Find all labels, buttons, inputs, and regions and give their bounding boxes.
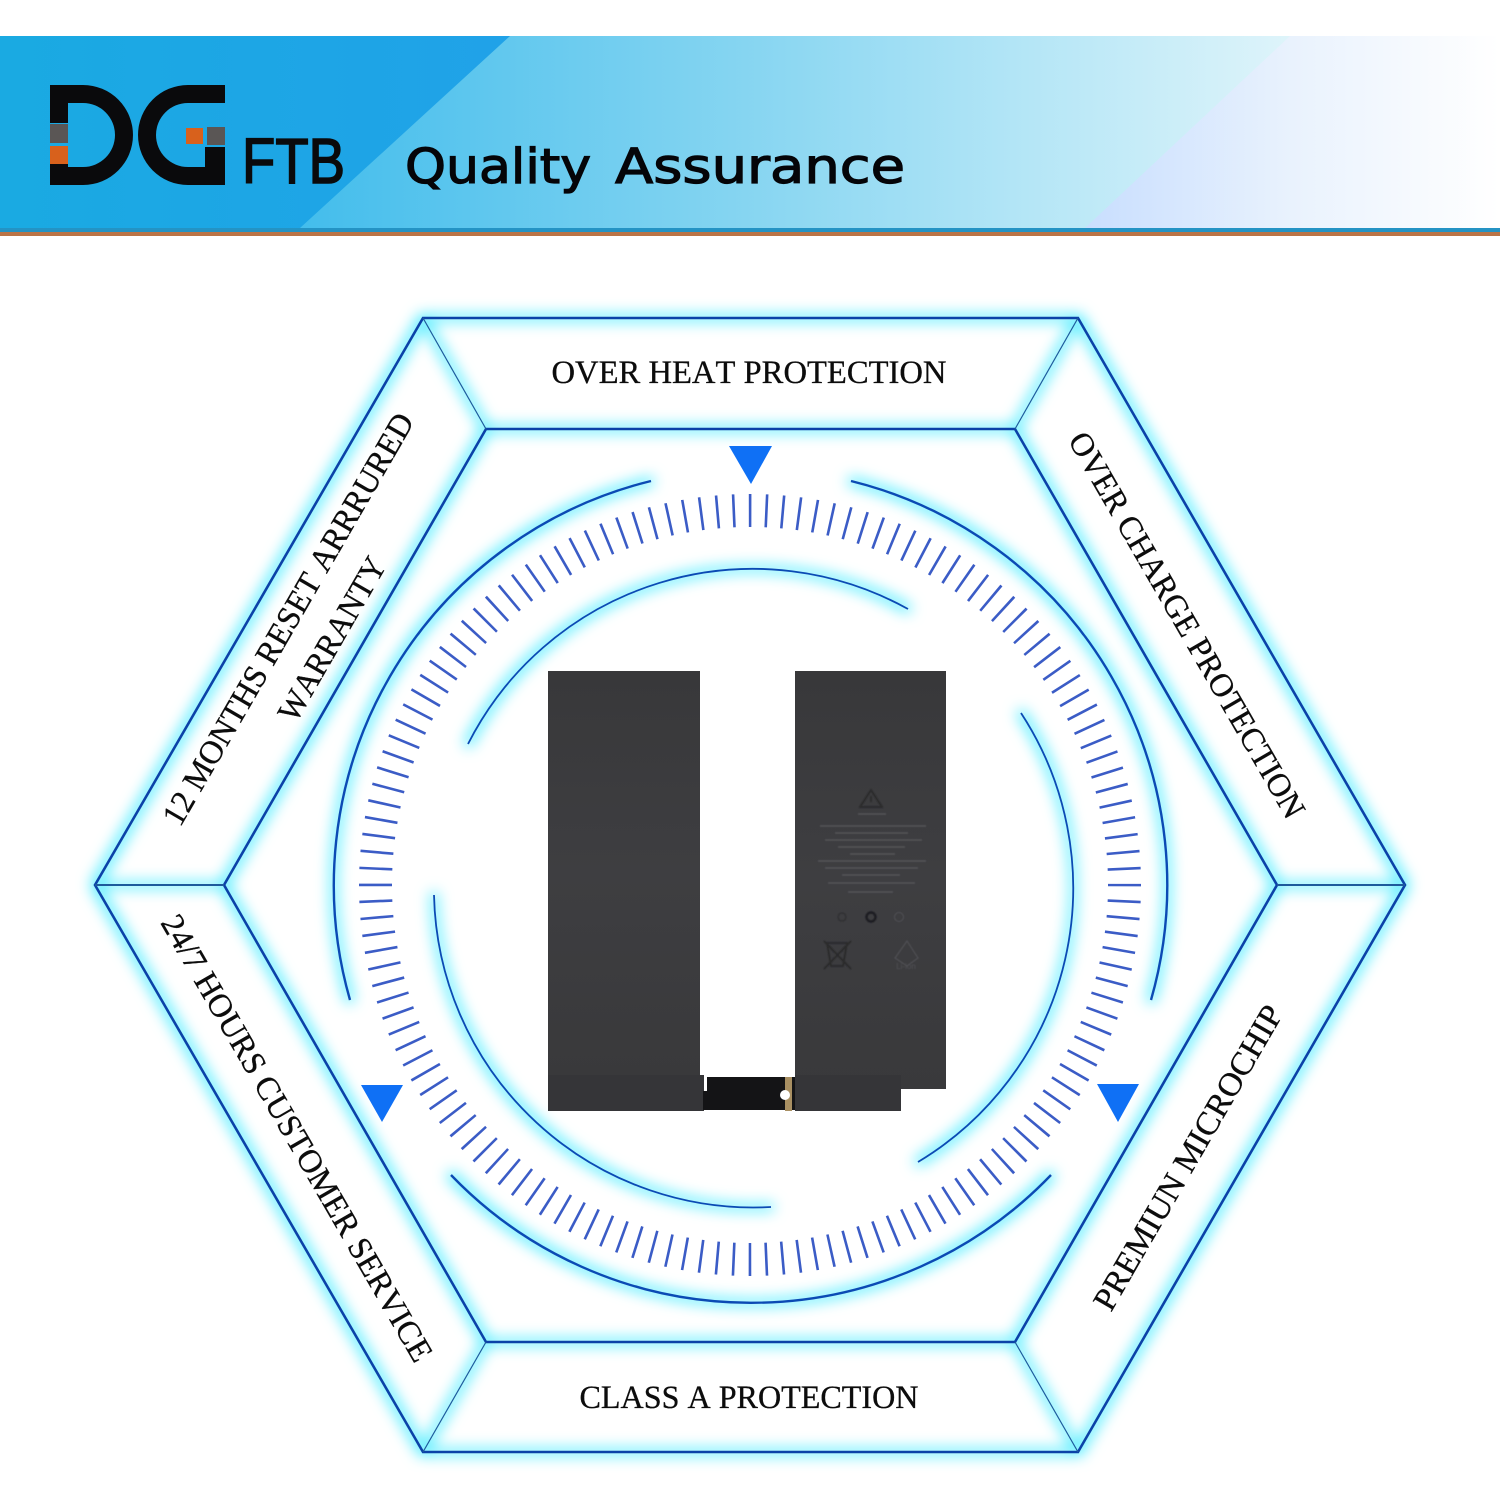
label: over charge protection: OVER CHARGE PROTECTION — [1061, 426, 1312, 825]
battery label — [818, 790, 926, 971]
left cell — [548, 671, 704, 1111]
inner hexagon — [224, 429, 1277, 1342]
heading: Quality Assurance: Assurance — [615, 139, 905, 195]
tick ring — [376, 510, 1124, 1260]
label: over heat protection: OVER HEAT PROTECTION — [552, 355, 947, 391]
logo: DG FTB: FTB — [242, 125, 345, 197]
right cell — [795, 671, 946, 1111]
direction triangles — [361, 446, 1139, 1122]
battery image — [548, 671, 946, 1111]
label: 24/7 hours customer service: 24/7 HOURS CUSTOMER SERVICE — [153, 909, 439, 1368]
outer hexagon — [95, 318, 1405, 1452]
hexagon and arc frame with glow — [95, 318, 1405, 1452]
battery label: Li-ion — [896, 962, 916, 971]
outer arcs — [334, 481, 1167, 1303]
label: premium microchip: PREMIUN MICROCHIP — [1087, 999, 1291, 1317]
header banner — [0, 36, 1500, 236]
logo: DG FTB — [50, 85, 345, 197]
label: class a protection: CLASS A PROTECTION — [580, 1380, 919, 1416]
inner arcs — [434, 569, 1073, 1207]
heading: Quality Assurance: Quality — [405, 139, 591, 195]
hexagon spokes — [95, 318, 1405, 1452]
label: 12 months warranty: WARRANTY — [271, 551, 394, 728]
label: 12 months warranty: 12 MONTHS RESET ARRRURED — [156, 407, 422, 832]
flex connector — [703, 1077, 795, 1111]
